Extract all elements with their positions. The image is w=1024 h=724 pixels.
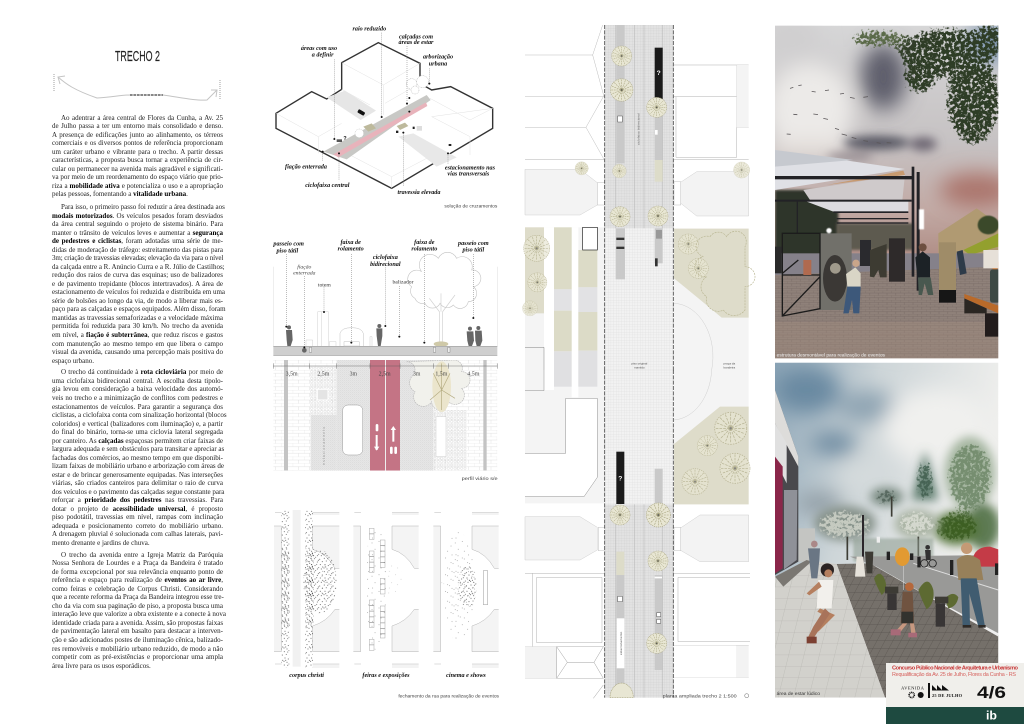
title block — [886, 663, 1024, 724]
axonometric diagram: crossing solution: áreas de estar — [399, 40, 434, 46]
edge lines — [273, 267, 497, 346]
text block: intro paragraph: características, a proposta busca tornar a experiência de cir- — [52, 156, 223, 164]
avenue band — [323, 95, 431, 159]
street surface — [605, 370, 673, 504]
street section and profile plan: perfil viário s/e — [462, 476, 498, 482]
crossings — [363, 123, 376, 132]
sidewalk — [775, 560, 885, 698]
text block: cycle route paragraph: largura adequada e sem obstáculos para transitar e apreciar as — [52, 445, 224, 453]
text block: outdoor events paragraph: res removíveis e mobiliário urbano reduzido, de modo a não — [52, 645, 223, 653]
enlarged plan, upper half — [522, 25, 755, 372]
bike symbols — [374, 424, 397, 454]
street section and profile plan: rolamento — [338, 247, 364, 253]
text block: motorized modes paragraph: modais motorizados. Os veículos pesados foram desviados — [52, 212, 223, 220]
text block: outdoor events paragraph: interação leve que valorize a obra existente e a conecte à nova — [52, 610, 226, 618]
street section and profile plan: rolamento — [411, 247, 437, 253]
text block: cycle route paragraph: piso podotátil, travessias em nível, rampas com inclinação — [52, 513, 223, 521]
passers-by — [811, 541, 818, 547]
totem and car outlines — [306, 312, 336, 346]
street section and profile plan: 4,5m — [467, 371, 480, 378]
event closure diagrams: fechamento da rua para realização de eventos — [398, 694, 499, 700]
axonometric diagram: crossing solution: arborização — [423, 55, 453, 61]
axonometric diagram: crossing solution: áreas com uso — [301, 46, 337, 52]
square and lawns, left — [525, 227, 605, 371]
text block: outdoor events paragraph: que a recente reforma da Praça da Bandeira integrou esse tre- — [52, 593, 224, 601]
photo: playful rest area: área de estar lúdico — [777, 691, 820, 697]
enlarged plan, lower half: planta ampliada trecho 2 1:500 — [663, 694, 737, 700]
street section and profile plan: 2,5m — [317, 371, 330, 378]
text block: intro paragraph: riza a mobilidade ativa e potencializa o uso e a apropriação — [52, 182, 223, 190]
totem with question mark: ? — [657, 70, 661, 77]
street section and profile plan: enterrada — [293, 271, 316, 277]
lights — [919, 209, 924, 229]
surroundings — [525, 25, 604, 159]
text block: outdoor events paragraph: de forma excepcional por sua relevância enquanto ponto de — [52, 568, 223, 576]
ground — [273, 346, 497, 355]
text block: outdoor events paragraph — [52, 551, 226, 670]
axonometric diagram: crossing solution: calçadas com — [399, 34, 433, 40]
text block: outdoor events paragraph: de pavimentação lateral em basalto para destacar a interven- — [52, 627, 223, 635]
boundary lines — [605, 370, 673, 698]
enlarged plan, upper half: piso original — [631, 362, 648, 366]
plan of profile: estacionamento — [322, 427, 326, 465]
axonometric diagram: crossing solution: vias transversais — [447, 172, 490, 178]
canopy sails — [775, 160, 904, 190]
planting strips — [616, 25, 625, 163]
feiras e exposicoes — [353, 513, 419, 679]
corpus christi — [274, 510, 339, 679]
street section and profile plan: balizador — [392, 280, 414, 286]
trees — [406, 79, 417, 89]
trees on the avenue — [610, 503, 670, 698]
axonometric diagram: crossing solution: estacionamento nas — [445, 165, 496, 171]
text block: cycle route paragraph: coloridos) e vertical (balizadores com iluminação) e, a partir — [52, 420, 223, 428]
text block: cycle route paragraph: A drenagem pluvial é solucionada com calhas laterais, pavi- — [52, 530, 223, 538]
transverse street south-east — [398, 133, 457, 167]
contest name: Concurso Público Nacional de Arquitetura e Urbanismo — [892, 666, 1019, 672]
boundary lines — [605, 25, 673, 371]
balloon — [895, 547, 910, 566]
text block: cycle route paragraph: adequada e posicionamento correto do mobiliário urbano. — [52, 522, 223, 530]
woman — [957, 543, 986, 628]
street section and profile plan: faixa de — [340, 240, 361, 246]
text block: cycle route paragraph: lizam faixas de mobiliário urbano e arborização com áreas de — [52, 462, 224, 470]
text block: cycle route paragraph: ciclistas, a ciclofaixa conta com sinalização horizontal (blocos — [52, 411, 227, 419]
enlarged plan, upper half: bandeira — [724, 366, 735, 370]
planting strips — [655, 469, 663, 503]
text block: motorized modes paragraph: visual da avenida, causando uma percepção mais positiva do — [52, 348, 223, 356]
running child — [807, 563, 835, 643]
text block: cycle route paragraph: O trecho dá continuidade à rota cicloviária por meio de — [61, 368, 223, 376]
axonometric diagram: crossing solution: solução de cruzamentos — [444, 203, 498, 209]
cinema e shows — [433, 513, 499, 679]
event closure diagrams — [274, 510, 499, 700]
text block: motorized modes paragraph: Para isso, o primeiro passo foi reduzir a área destinada aos — [61, 203, 225, 211]
street section and profile plan: 1,5m — [435, 371, 448, 378]
text block: cycle route paragraph: dos veículos e o pavimento das calçadas segue constante para — [52, 488, 224, 496]
text block: motorized modes paragraph: didas de moderação de tráfego: estreitamento das pistas para — [52, 246, 223, 254]
IAB logo: ib — [986, 708, 997, 722]
text block: intro paragraph: cular ou permanecer na avenida mais agradável e significati- — [52, 165, 223, 173]
text block: cycle route paragraph: estar e de brincar generosamente equipadas. Nas interseções — [52, 471, 223, 479]
cyclist — [921, 545, 936, 567]
car — [343, 405, 363, 455]
text block: motorized modes paragraph: mantidas as travessias semaforizadas e a velocidade máxima — [52, 314, 223, 322]
text block: cycle route paragraph: viárias, são criados canteiros para delimitar o raio de curva — [52, 479, 223, 487]
cycle lane — [333, 102, 427, 157]
labels: raio reduzido — [352, 27, 386, 33]
street section and profile plan: piso tátil — [461, 248, 484, 254]
trees — [870, 437, 1000, 550]
text block: motorized modes paragraph: espaço urbano. — [52, 357, 94, 365]
text block: outdoor events paragraph: O trecho da avenida entre a Igreja Matriz da Paróquia — [61, 551, 223, 559]
street section and profile plan — [272, 240, 498, 482]
street section and profile plan: passeio com — [457, 241, 489, 247]
axonometric diagram: crossing solution: fiação enterrada — [285, 164, 327, 170]
car — [357, 109, 365, 116]
plan of profile — [273, 360, 497, 471]
text block: intro paragraph: A presença de edificações junto ao alinhamento, os térreos — [52, 131, 223, 139]
totems: ? — [343, 136, 347, 142]
text block: outdoor events paragraph: Nossa Senhora de Lourdes e a Praça da Bandeira é tratado — [52, 559, 223, 567]
lamp post and bollards — [862, 515, 864, 567]
street section and profile plan: 3,5m — [286, 371, 298, 378]
text block: motorized modes paragraph: estacionamento de veículos foi reduzida e distribuída em uma — [52, 288, 225, 296]
transverse street north-west — [327, 91, 376, 120]
text block: intro paragraph: um caráter urbano e vibrante para o trecho. A partir dessas — [52, 148, 223, 156]
building edges — [276, 63, 493, 188]
tree canopy leaves — [852, 26, 998, 146]
people — [286, 324, 482, 346]
street section and profile plan: totem — [318, 282, 331, 288]
totem with question mark — [616, 452, 624, 504]
text block: intro paragraph: comerciais e os diversos pontos de referência proporcionam — [52, 139, 223, 147]
block outline — [276, 43, 493, 188]
text block: outdoor events paragraph: cho da via com sua paginação de piso, a proposta busca uma — [52, 602, 223, 610]
text block: motorized modes paragraph: 3m; criação de travessias elevadas; elevação da via para o nível — [52, 254, 223, 262]
text block: motorized modes paragraph: da calçada entre a R. Anúncio Curra e a R. Júlio de Castilhos; — [52, 263, 225, 271]
dimensions — [273, 365, 497, 367]
text block: intro paragraph: pelas pessoas, fomentando a vitalidade urbana. — [52, 190, 188, 198]
section labels: passeio com — [272, 242, 304, 248]
text block: motorized modes paragraph: permitida foi reduzida para 30 km/h. No trecho da avenida — [52, 322, 223, 330]
enlarged plan, lower half: estacionamento — [619, 631, 623, 655]
text block: cycle route paragraph: do final do binário, torna-se uma ciclovia lateral segregada — [52, 428, 223, 436]
street section and profile plan: 2,5m — [379, 371, 391, 378]
text block: intro paragraph: va por meio de um reordenamento do espaço viário que prio- — [52, 173, 223, 181]
text block: cycle route paragraph: estacionamentos de veículos. Para garantir a segurança dos — [52, 403, 223, 411]
text block: cycle route paragraph: dotar o projeto de acessibilidade universal, é proposto — [52, 505, 223, 513]
text block: motorized modes paragraph: redução dos raios de curva das esquinas; uso de balizadores — [52, 271, 223, 279]
text block: cycle route paragraph: uma ciclofaixa bidirecional central. A escolha desta tipolo- — [52, 377, 223, 385]
tiny notes: ciclofaixa bidirecional — [636, 113, 640, 145]
text block: intro paragraph: Ao adentrar a área central de Flores da Cunha, a Av. 25 — [61, 114, 223, 122]
axonometric diagram: crossing solution: ciclofaixa central — [305, 183, 350, 189]
street section and profile plan: ciclofaixa — [373, 255, 398, 261]
axonometric diagram: crossing solution: travessia elevada — [398, 190, 440, 196]
leaders — [286, 254, 473, 347]
photo: playful rest area — [773, 363, 1000, 698]
photo: dismountable event structure: estrutura desmontável para realização de eventos — [777, 352, 885, 357]
play springs — [874, 574, 958, 627]
child with balloon — [891, 582, 917, 637]
panels — [820, 233, 852, 310]
square lawn, right — [674, 229, 749, 371]
text block: cycle route paragraph: mento drenante e jardins de chuva. — [52, 539, 150, 547]
bench — [964, 294, 998, 313]
contest subtitle: Requalificação da Av. 25 de Julho, Flores da Cunha - RS — [892, 672, 1016, 678]
project logo — [901, 683, 963, 698]
tree — [408, 252, 481, 309]
text block: motorized modes paragraph: manter o trânsito de veículos leves e aumentar a segurança — [52, 229, 223, 237]
enlarged plan, lower half — [525, 370, 750, 700]
sheet number: 4/6 — [977, 683, 1006, 702]
route sketch: section location arrow — [54, 74, 220, 100]
street section and profile plan: 3m — [413, 371, 421, 378]
axonometric diagram: crossing solution — [276, 27, 498, 209]
text block: motorized modes paragraph: série de bolsões ao longo da via, de modo a liberar mais es- — [52, 297, 223, 305]
axonometric diagram: crossing solution: urbana — [429, 61, 447, 67]
pavers — [837, 563, 998, 698]
axonometric diagram: crossing solution: a definir — [312, 53, 334, 59]
text block: motorized modes paragraph: paço para as calçadas e espaços equipados. Além disso, foram — [52, 305, 226, 313]
street section and profile plan: piso tátil — [275, 248, 298, 254]
structure — [775, 167, 920, 291]
text block: intro paragraph — [52, 114, 223, 198]
street surface — [605, 25, 673, 228]
text block: outdoor events paragraph: identidade criada para a avenida. Assim, são propostas faixas — [52, 619, 223, 627]
text block: motorized modes paragraph: de pedestres e ciclistas, foram adotadas uma série de me- — [52, 237, 223, 245]
leaders — [323, 33, 448, 187]
back trees and ground — [775, 190, 838, 263]
lane line — [918, 590, 998, 636]
totem with question mark — [655, 48, 663, 99]
people — [775, 243, 1000, 313]
enlarged plan, upper half: praça da — [724, 362, 735, 366]
text block: motorized modes paragraph: da área central seguindo o projeto de sistema binário. Para — [52, 220, 223, 228]
text block: motorized modes paragraph: em nível, a fiação é subterrânea, que reduz riscos e gastos — [52, 331, 223, 339]
text block: motorized modes paragraph: e de pavimento trepidante (blocos intertravados). A área de — [52, 280, 223, 288]
street section and profile plan: 3m — [350, 371, 358, 378]
project logo: AVENIDA — [901, 686, 925, 690]
enlarged plan, upper half: mantido — [634, 366, 645, 370]
text block: cycle route paragraph: gia levou em consideração a baixa velocidade dos automó- — [52, 385, 223, 393]
feiras e exposicoes: feiras e exposições — [362, 673, 410, 679]
text block: motorized modes paragraph: com manutenção ao mesmo tempo em que libera o campo — [52, 340, 223, 348]
text block: cycle route paragraph: veis no trecho e a minimização de conflitos com pedestres e — [52, 394, 223, 402]
text block: outdoor events paragraph: competir com as pré-existências e proporcionar uma ampla — [52, 653, 223, 661]
surroundings — [525, 370, 605, 503]
project logo: 25 DE JULHO — [932, 693, 963, 698]
birds — [787, 85, 891, 143]
text block: outdoor events paragraph: ção e são adicionados postes de iluminação cênica, balizado- — [52, 636, 223, 644]
cinema e shows: cinema e shows — [446, 673, 486, 679]
text block: cycle route paragraph — [52, 368, 227, 547]
trees on the avenue — [575, 46, 668, 227]
corpus christi: corpus christi — [289, 673, 324, 679]
text block: cycle route paragraph: reforçar a prioridade dos pedestres nas travessias. Para — [52, 496, 223, 504]
text block: cycle route paragraph: por canteiro. As calçadas espaçosas permitem criar faixas de — [52, 437, 223, 445]
text block: motorized modes paragraph — [52, 203, 226, 365]
text block: cycle route paragraph: fachadas dos comércios, ao mesmo tempo em que disponibi- — [52, 454, 223, 462]
text block: intro paragraph: de Julho passa a ter um entorno mais consolidado e denso. — [52, 122, 223, 130]
text block: outdoor events paragraph: referência e espaço para realização de eventos ao ar livre, — [52, 576, 223, 584]
street section and profile plan: faixa de — [414, 240, 435, 246]
street section and profile plan: bidirecional — [370, 262, 401, 268]
road — [850, 555, 998, 637]
text block: outdoor events paragraph: como feiras e celebração de Corpus Christi. Considerando — [52, 585, 223, 593]
car — [973, 547, 998, 567]
text block: outdoor events paragraph: área livre para os usos esporádicos. — [52, 662, 151, 670]
totem with question mark: ? — [618, 475, 622, 482]
building — [775, 390, 798, 575]
title: TRECHO 2 — [115, 48, 160, 65]
street section and profile plan: fiação — [297, 264, 312, 271]
photo: dismountable event structure — [775, 26, 998, 358]
